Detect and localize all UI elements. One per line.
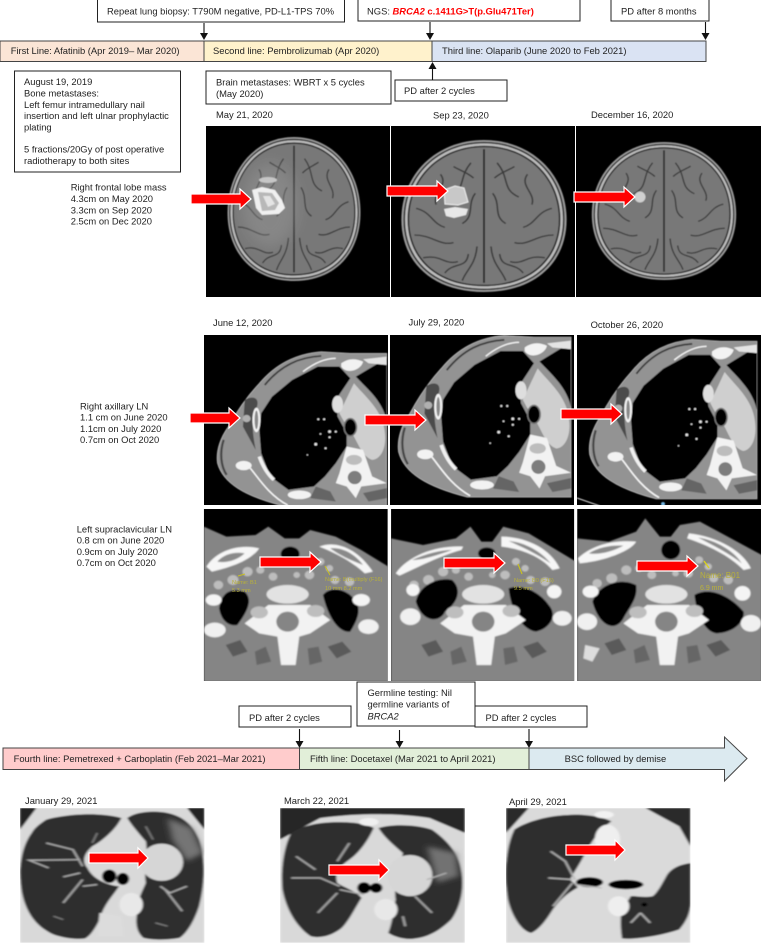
box: bone metastases note: radiotherapy to both sites bbox=[24, 155, 130, 166]
box: PD after 8 months bbox=[611, 0, 709, 21]
box: PD after 2 cycles: PD after 2 cycles bbox=[404, 85, 475, 96]
box: brain metastases WBRT: (May 2020) bbox=[216, 88, 263, 99]
segment: BSC arrow bbox=[529, 737, 747, 781]
arrow: January lung mass bbox=[89, 848, 148, 868]
date: May 21, 2020: May 21, 2020 bbox=[216, 109, 273, 120]
CT neck panel: July 2020: 9.5 mm bbox=[514, 586, 533, 592]
MRI panel: Sep 23, 2020 bbox=[391, 126, 575, 297]
box: brain metastases WBRT bbox=[206, 71, 391, 104]
segment: fourth line: Fourth line: Pemetrexed + Carboplatin (Feb 2021–Mar 2021) bbox=[14, 753, 266, 764]
date: Sep 23, 2020: Sep 23, 2020 bbox=[433, 110, 489, 120]
arrow: PD after 8 months to timeline bbox=[702, 22, 710, 40]
label: right frontal lobe mass: 4.3cm on May 2020 bbox=[71, 193, 153, 204]
box: PD after 2 cycles (fifth line) bbox=[475, 706, 587, 727]
arrow: NGS to timeline bbox=[426, 22, 434, 40]
CT neck panel: June 2020: 5.3 mm bbox=[232, 588, 251, 594]
label: right frontal lobe mass: 2.5cm on Dec 2020 bbox=[71, 216, 152, 227]
box: brain metastases WBRT: Brain metastases: WBRT x 5 cycles bbox=[216, 76, 365, 88]
box: bone metastases note bbox=[14, 71, 180, 172]
segment: second line bbox=[204, 41, 432, 62]
segment: fifth line: Fifth line: Docetaxel (Mar 2021 to April 2021) bbox=[310, 753, 496, 764]
lung CT panel: April 29, 2021 bbox=[506, 808, 690, 943]
box: NGS BRCA2 result: NGS: BRCA2 c.1411G>T(p.Glu471Ter) bbox=[367, 6, 534, 16]
segment: third line: Third line: Olaparib (June 2020 to Feb 2021) bbox=[442, 45, 626, 56]
box: PD after 8 months: PD after 8 months bbox=[621, 6, 697, 16]
box: bone metastases note: plating bbox=[24, 122, 52, 132]
CT neck panel: October 2020 bbox=[577, 509, 761, 682]
box: repeat lung biopsy: Repeat lung biopsy: T790M negative, PD-L1-TPS 70% bbox=[107, 6, 334, 16]
CT neck panel: June 2020 bbox=[204, 509, 388, 682]
arrow: October supraclavicular LN bbox=[637, 556, 698, 576]
label: left supraclavicular LN: Left supraclavicular LN bbox=[77, 523, 172, 534]
box: PD after 2 cycles bbox=[395, 80, 507, 101]
label: right frontal lobe mass: Right frontal lobe mass bbox=[71, 182, 167, 193]
label: left supraclavicular LN: 0.9cm on July 2020 bbox=[77, 546, 158, 557]
box: PD after 2 cycles (fourth line) bbox=[239, 706, 351, 727]
box: germline testing bbox=[357, 682, 475, 726]
box: bone metastases note: August 19, 2019 bbox=[24, 76, 92, 87]
CT neck panel: October 2020: Name: B01 bbox=[700, 571, 741, 580]
label: right axillary LN: 1.1cm on July 2020 bbox=[80, 423, 161, 434]
CT neck panel: June 2020: 10 mm 8.2 mm bbox=[325, 586, 363, 592]
arrow: March lung mass bbox=[329, 860, 389, 880]
box: bone metastases note: Bone metastases: bbox=[24, 88, 99, 98]
box: bone metastases note: Left femur intramedullary nail bbox=[24, 99, 145, 110]
lung CT panel: January 29, 2021 bbox=[20, 808, 204, 943]
label: left supraclavicular LN: 0.7cm on Oct 2020 bbox=[77, 557, 156, 568]
label: right frontal lobe mass: 3.3cm on Sep 2020 bbox=[71, 204, 152, 215]
arrow: PD up to timeline bbox=[428, 62, 436, 80]
lung CT panel: March 22, 2021 bbox=[280, 808, 465, 943]
box: germline testing: Germline testing: Nil bbox=[368, 687, 452, 698]
arrow: biopsy to timeline bbox=[200, 23, 208, 40]
box: bone metastases note: insertion and left ulnar prophylactic bbox=[24, 110, 169, 121]
date: January 29, 2021: January 29, 2021 bbox=[25, 795, 97, 806]
box: germline testing: BRCA2 bbox=[368, 710, 400, 721]
box: bone metastases note: 5 fractions/20Gy of post operative bbox=[24, 144, 164, 155]
CT neck panel: October 2020: 6.9 mm bbox=[700, 585, 724, 592]
segment: second line: Second line: Pembrolizumab (Apr 2020) bbox=[213, 45, 379, 56]
label: right frontal lobe mass bbox=[71, 182, 167, 227]
timeline bar: first to third line bbox=[0, 41, 706, 62]
label: right axillary LN: 0.7cm on Oct 2020 bbox=[80, 434, 159, 445]
arrow: PD to BSC start bbox=[525, 729, 533, 748]
label: right axillary LN: 1.1 cm on June 2020 bbox=[80, 412, 168, 423]
CT chest panel: July 29, 2020 bbox=[390, 335, 574, 505]
label: right axillary LN: Right axillary LN bbox=[80, 400, 148, 411]
arrow: October axillary LN bbox=[561, 404, 622, 424]
arrow: Dec MRI lesion bbox=[574, 187, 635, 207]
segment: fifth line bbox=[300, 748, 529, 770]
date: April 29, 2021: April 29, 2021 bbox=[509, 796, 567, 807]
arrow: PD to fifth line start bbox=[296, 729, 304, 748]
date: June 12, 2020: June 12, 2020 bbox=[213, 317, 272, 328]
label: right axillary LN bbox=[80, 400, 168, 445]
arrow: July supraclavicular LN bbox=[444, 553, 505, 573]
CT neck panel: June 2020: Name: B(multiply (F16) bbox=[325, 577, 383, 583]
arrow: April lung mass bbox=[566, 840, 625, 860]
segment: BSC arrow: BSC followed by demise bbox=[565, 753, 666, 764]
CT chest panel: October 26, 2020 bbox=[577, 335, 761, 506]
MRI panel: May 21, 2020 bbox=[206, 126, 390, 297]
label: left supraclavicular LN bbox=[77, 523, 172, 568]
date: July 29, 2020: July 29, 2020 bbox=[408, 316, 464, 328]
arrow: May MRI lesion bbox=[191, 189, 251, 209]
label: left supraclavicular LN: 0.8 cm on June 2020 bbox=[77, 534, 164, 545]
arrow: Sep MRI lesion bbox=[387, 181, 448, 201]
box: repeat lung biopsy bbox=[98, 0, 344, 22]
segment: third line bbox=[432, 41, 706, 62]
box: PD after 2 cycles (fourth line): PD after 2 cycles bbox=[249, 712, 320, 723]
box: NGS BRCA2 result bbox=[358, 0, 580, 21]
segment: first line: First Line: Afatinib (Apr 2019– Mar 2020) bbox=[11, 45, 180, 56]
arrow: July axillary LN bbox=[365, 410, 426, 430]
date: October 26, 2020: October 26, 2020 bbox=[591, 319, 663, 330]
segment: first line bbox=[0, 41, 204, 62]
CT neck panel: July 2020 bbox=[391, 509, 576, 682]
arrow: germline to fifth line bbox=[396, 730, 404, 748]
CT neck panel: June 2020: Name: B1 bbox=[232, 580, 257, 586]
date: March 22, 2021: March 22, 2021 bbox=[284, 795, 349, 806]
arrow: June supraclavicular LN bbox=[260, 552, 321, 572]
MRI panel: December 16, 2020 bbox=[576, 126, 761, 297]
box: germline testing: germline variants of bbox=[368, 699, 450, 710]
box: PD after 2 cycles (fifth line): PD after 2 cycles bbox=[486, 712, 557, 723]
CT chest panel: June 12, 2020 bbox=[204, 335, 388, 506]
date: December 16, 2020: December 16, 2020 bbox=[591, 109, 673, 120]
segment: fourth line bbox=[3, 748, 300, 770]
arrow: June axillary LN bbox=[190, 408, 240, 428]
CT neck panel: July 2020: Name: B0 (F15) bbox=[514, 578, 554, 584]
timeline bar: fourth line to BSC bbox=[3, 737, 747, 781]
